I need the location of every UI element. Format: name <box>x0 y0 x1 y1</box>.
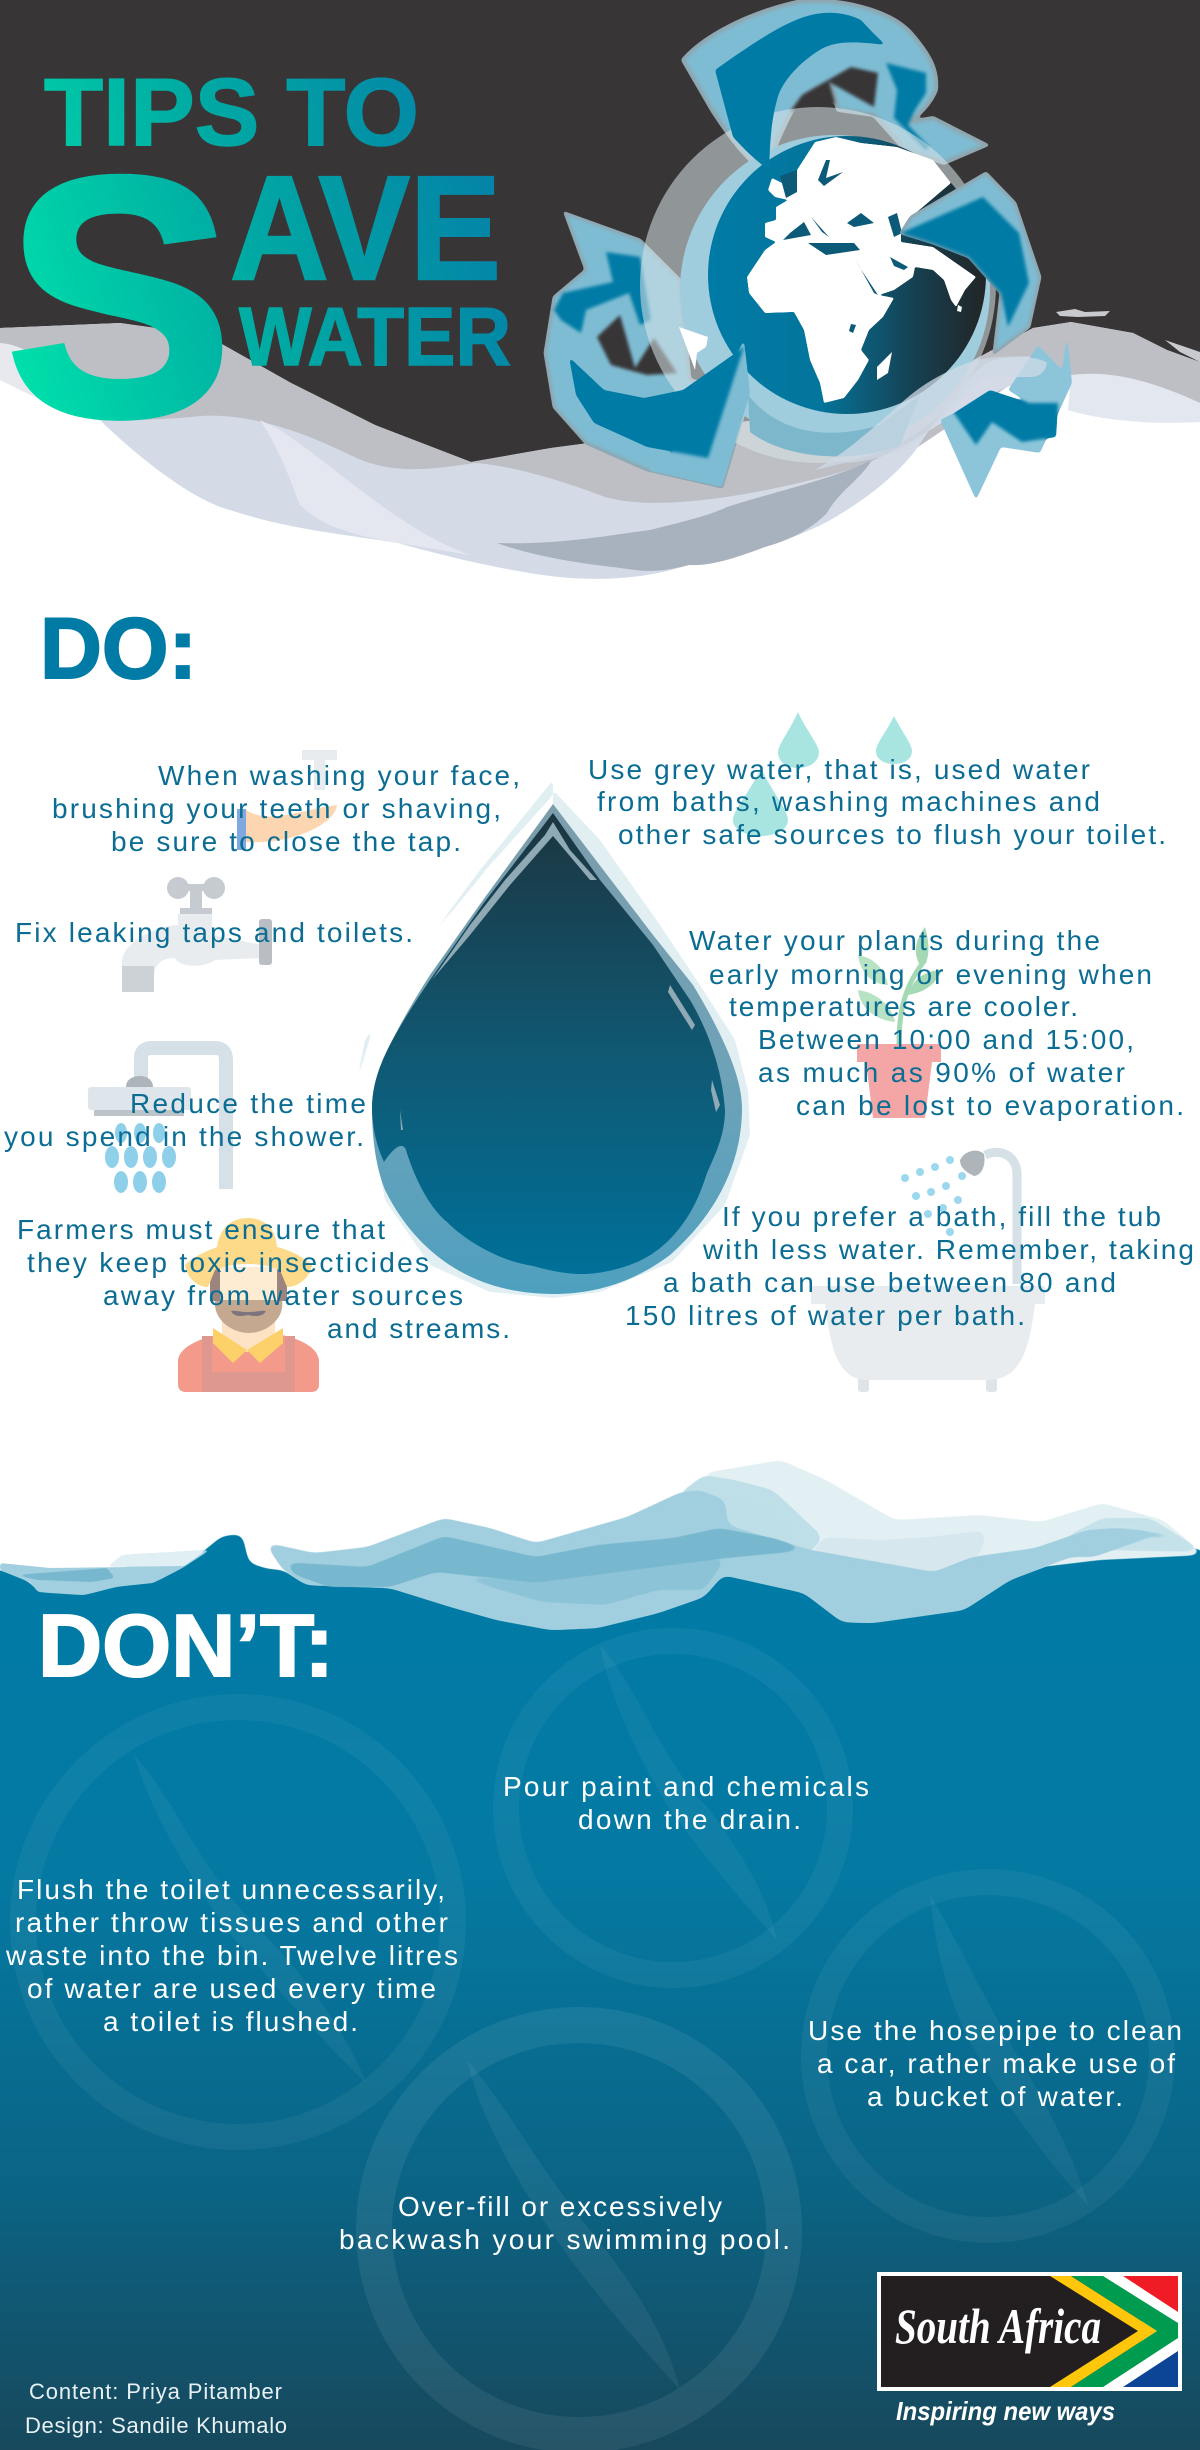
text block: DO tips, right column: Water your plants during the <box>689 925 1100 956</box>
text block: DON'T tips: rather throw tissues and other <box>15 1907 448 1938</box>
icon: water drops <box>733 712 912 836</box>
header dark background <box>0 0 1200 545</box>
globe with recycling arrows <box>545 1 1072 500</box>
title: TIPS TO <box>44 59 419 166</box>
text block: DO tips, right column: a bath can use between 80 and <box>663 1267 1116 1298</box>
translucent ribbon over globe <box>815 357 1047 470</box>
text block: DON'T tips: Pour paint and chemicals <box>503 1771 869 1802</box>
text block: DO tips, left column: Farmers must ensure that <box>17 1214 385 1245</box>
text block: DO tips, right column: temperatures are cooler. <box>729 991 1078 1022</box>
title <box>5 59 511 488</box>
icon: shower <box>88 1048 226 1193</box>
text block: DON'T tips: a car, rather make use of <box>817 2048 1175 2079</box>
top arrow outline and head <box>683 1 986 175</box>
glass bubble <box>640 107 996 463</box>
text block: DON'T tips: Use the hosepipe to clean <box>808 2015 1182 2046</box>
left arrow, upper part <box>545 213 750 487</box>
deep water background <box>0 1534 1200 2450</box>
text block: DON'T tips: a bucket of water. <box>867 2081 1123 2112</box>
circle: toilet <box>23 1707 453 2137</box>
text block: DO tips, left column: When washing your face, <box>158 760 520 791</box>
wave: grey layer <box>0 322 1200 545</box>
top arrow blade <box>715 13 886 170</box>
text block: DO tips, right column: from baths, washing machines and <box>597 786 1100 817</box>
wave: pale patches <box>0 309 1200 423</box>
text block: DO tips, right column: as much as 90% of water <box>758 1057 1125 1088</box>
text block: DO tips, left column: be sure to close the tap. <box>111 826 461 857</box>
title: AVE <box>230 146 501 311</box>
text block: DO tips, right column: with less water. Remember, taking <box>702 1234 1194 1265</box>
text block: DON'T tips <box>5 1771 1182 2255</box>
right arrow <box>901 173 1072 500</box>
continents: Europe Asia Africa <box>679 137 976 403</box>
text block: DO tips, left column: you spend in the shower. <box>4 1121 364 1152</box>
wave: main pale swell <box>100 357 1048 579</box>
heading: DON'T: DON’T: <box>38 1596 334 1695</box>
icon: farmer <box>178 1218 319 1392</box>
title: WATER <box>239 290 511 383</box>
text block: DON'T tips: backwash your swimming pool. <box>339 2224 790 2255</box>
logo: South Africa: Inspiring new ways <box>896 2396 1115 2426</box>
text block: DO tips, left column: and streams. <box>327 1313 510 1344</box>
text block: DO tips, right column: If you prefer a bath, fill the tub <box>722 1201 1161 1232</box>
text block: DO tips, right column: early morning or evening when <box>709 959 1152 990</box>
heading: DO: DO: <box>40 601 197 697</box>
text block: DO tips, right column <box>588 754 1194 1331</box>
text block: DO tips, left column: Fix leaking taps and toilets. <box>15 917 413 948</box>
central water drop <box>352 780 750 1298</box>
text block: DO tips, right column: other safe sources to flush your toilet. <box>618 819 1166 850</box>
icon: potted plant <box>857 927 942 1118</box>
circle: pool <box>374 2025 784 2435</box>
icon: bathtub <box>811 1151 1045 1392</box>
text block: DO tips, right column: Use grey water, that is, used water <box>588 754 1090 785</box>
text block: DO tips, right column: can be lost to evaporation. <box>796 1090 1184 1121</box>
credits <box>25 2379 287 2438</box>
logo: South Africa: South Africa <box>895 2298 1101 2354</box>
credits: Design: Sandile Khumalo <box>25 2413 287 2438</box>
circle: hosepipe <box>814 1882 1162 2230</box>
no-entry circles <box>23 1641 1162 2435</box>
circle: paint <box>506 1641 840 1975</box>
light ring around globe <box>680 135 990 445</box>
foam layers on water surface <box>0 1460 1200 1630</box>
text block: DO tips, left column <box>4 760 520 1344</box>
text block: DO tips, left column: away from water sources <box>103 1280 463 1311</box>
text block: DO tips, right column: 150 litres of water per bath. <box>625 1300 1025 1331</box>
text block: DO tips, right column: Between 10:00 and 15:00, <box>758 1024 1134 1055</box>
text block: DON'T tips: of water are used every time <box>27 1973 436 2004</box>
title: S <box>5 106 233 488</box>
text block: DON'T tips: Flush the toilet unnecessarily, <box>17 1874 445 1905</box>
credits: Content: Priya Pitamber <box>29 2379 282 2404</box>
icon: leaking tap <box>122 877 272 992</box>
icon: hand under tap <box>237 750 337 850</box>
text block: DON'T tips: Over-fill or excessively <box>398 2191 722 2222</box>
text block: DON'T tips: down the drain. <box>578 1804 801 1835</box>
logo: South Africa <box>877 2272 1182 2426</box>
text block: DO tips, left column: they keep toxic insecticides <box>27 1247 429 1278</box>
lower ribbon <box>748 395 920 456</box>
text block: DO tips, left column: brushing your teeth or shaving, <box>52 793 501 824</box>
text block: DON'T tips: a toilet is flushed. <box>103 2006 358 2037</box>
earth sphere <box>708 136 986 414</box>
left arrow, lower blade <box>569 340 750 487</box>
text block: DO tips, left column: Reduce the time <box>130 1088 366 1119</box>
text block: DON'T tips: waste into the bin. Twelve litres <box>5 1940 458 1971</box>
